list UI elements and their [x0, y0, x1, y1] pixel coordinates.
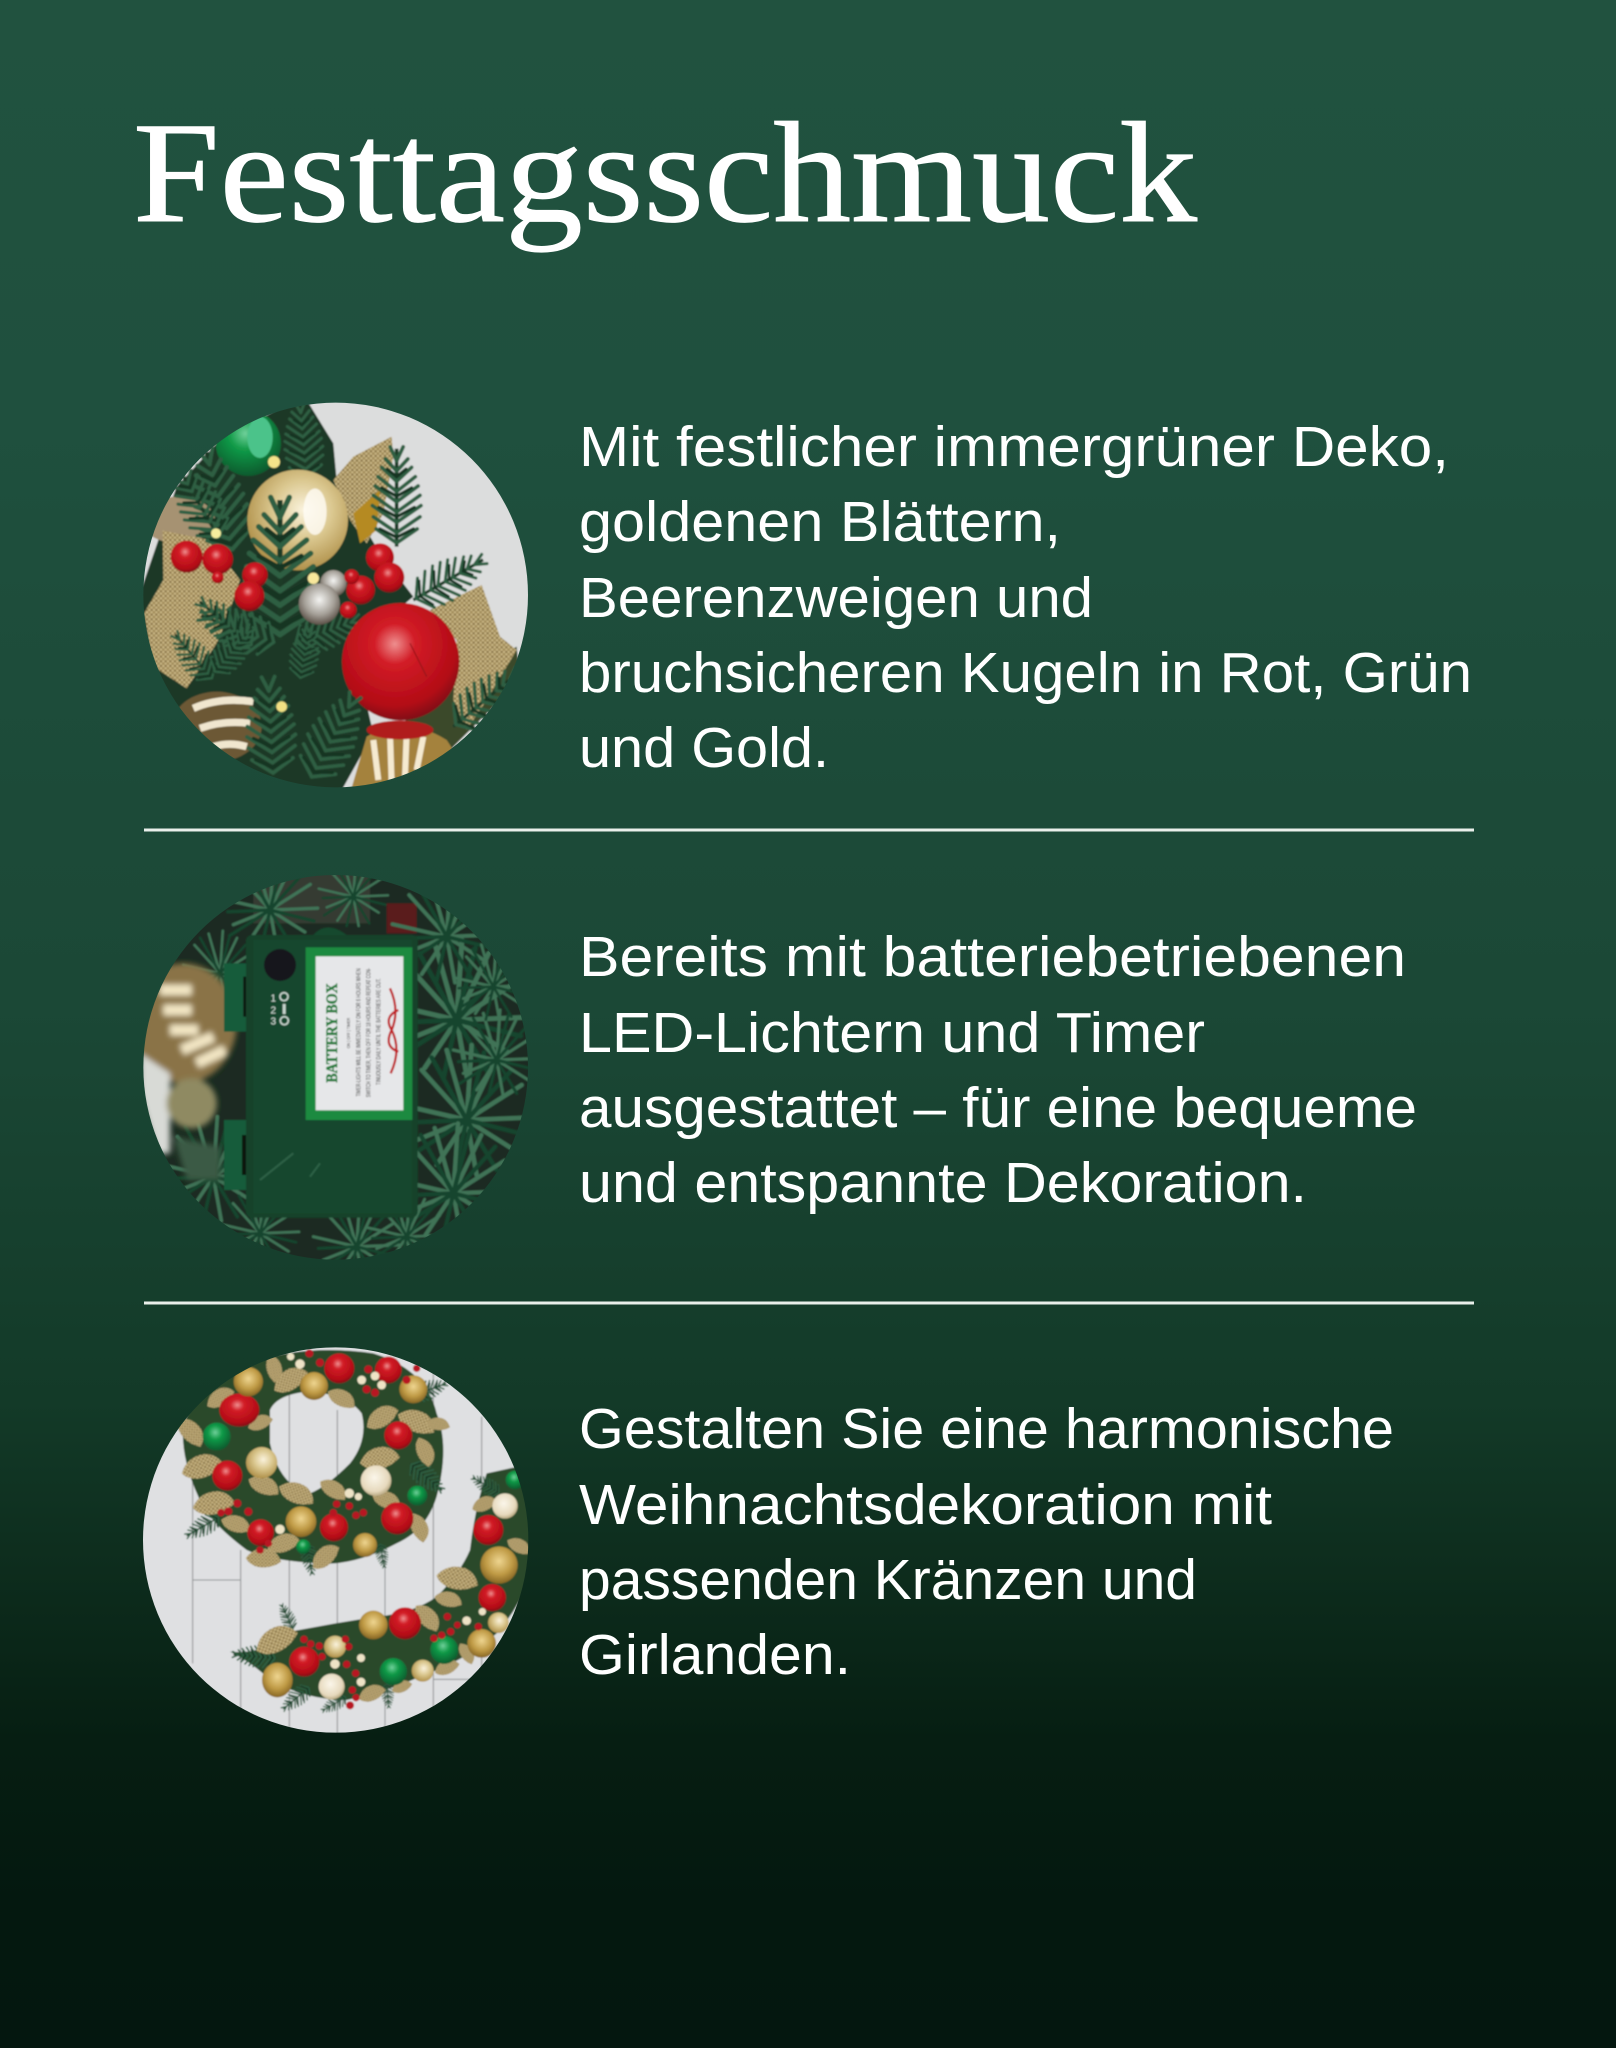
icon: garland: [230, 1463, 534, 1717]
switch labels: 2: [271, 1005, 277, 1016]
title: Festtagsschmuck: [133, 94, 1197, 253]
text: evergreen description: Beerenzweigen und: [579, 566, 1093, 630]
panel: evergreen decoration: [140, 400, 1472, 793]
icon: blurred gold ornament: [130, 963, 237, 1180]
photo: battery box in garland: [143, 875, 528, 1260]
icon: battery box: [224, 927, 418, 1218]
text: battery description: [579, 925, 1417, 1215]
text: battery description: Bereits mit batteriebetriebenen: [579, 925, 1406, 989]
text: wreath description: [579, 1397, 1394, 1687]
icon: red bauble: [342, 603, 459, 720]
battery box label: [306, 947, 412, 1120]
icon: gold leaf right: [430, 585, 517, 730]
battery box label: BATTERY BOX: [324, 983, 341, 1083]
text: battery description: ausgestattet – für eine bequeme: [579, 1076, 1417, 1140]
icon: gold bauble: [247, 470, 348, 570]
text: evergreen description: goldenen Blättern,: [579, 490, 1061, 554]
text: wreath description: Girlanden.: [579, 1623, 851, 1687]
icon: black button: [264, 949, 296, 981]
icon: wreath: [172, 1349, 451, 1576]
icon: silver baubles: [299, 570, 347, 625]
switch labels: 3: [271, 1017, 277, 1028]
text: evergreen description: [579, 415, 1472, 780]
icon: red ornament flourish: [389, 988, 398, 1073]
photo: ornaments and pine sprigs: [140, 400, 533, 793]
planks: [193, 1373, 482, 1737]
icon: gold leaf top: [333, 437, 393, 543]
baubles: [506, 1471, 524, 1489]
text: evergreen description: bruchsicheren Kugeln in Rot, Grün: [579, 641, 1472, 705]
text: evergreen description: Mit festlicher immergrüner Deko,: [579, 415, 1449, 479]
switch labels: 1: [271, 994, 277, 1005]
icon: gold leaf left: [144, 531, 240, 688]
panel: wreaths and garlands: [140, 1343, 1394, 1737]
panel: battery box: [143, 875, 1414, 1260]
icon: green bauble: [216, 411, 281, 476]
photo: wreath and garland on white planks: [140, 1343, 534, 1737]
baubles: [324, 1353, 354, 1383]
berries: [300, 1613, 482, 1709]
text: battery description: und entspannte Dekoration.: [579, 1151, 1307, 1215]
text: battery description: LED-Lichtern und Timer: [579, 1001, 1205, 1065]
battery box label: TINUOUSLY DAILY UNTIL THE BATTERIES ARE OUT.: [376, 978, 382, 1085]
battery box label: ON | OFF | TIMER: [346, 1017, 352, 1048]
gold leaves: [172, 1353, 451, 1574]
text: wreath description: passenden Kränzen und: [579, 1548, 1197, 1612]
text: evergreen description: und Gold.: [579, 716, 829, 780]
icon: red berries: [171, 541, 404, 618]
icon: gold fluted ornament left: [172, 692, 262, 762]
battery box label: TIMER-LIGHTS WILL BE IMMEDIATELY ON FOR 6 HOURS WHEN: [356, 968, 362, 1097]
berries: [217, 1349, 420, 1554]
switch labels: [271, 994, 277, 1028]
icon: pine needles: [148, 875, 528, 1260]
icon: gold fluted ornament right: [350, 721, 453, 793]
gold leaves: [251, 1493, 534, 1705]
battery box label: SWITCH TO TIMER, THEN OFF FOR 18 HOURS AND REPEAT CON-: [366, 968, 372, 1097]
text: wreath description: Weihnachtsdekoration mit: [579, 1473, 1272, 1537]
text: wreath description: Gestalten Sie eine harmonische: [579, 1397, 1394, 1461]
